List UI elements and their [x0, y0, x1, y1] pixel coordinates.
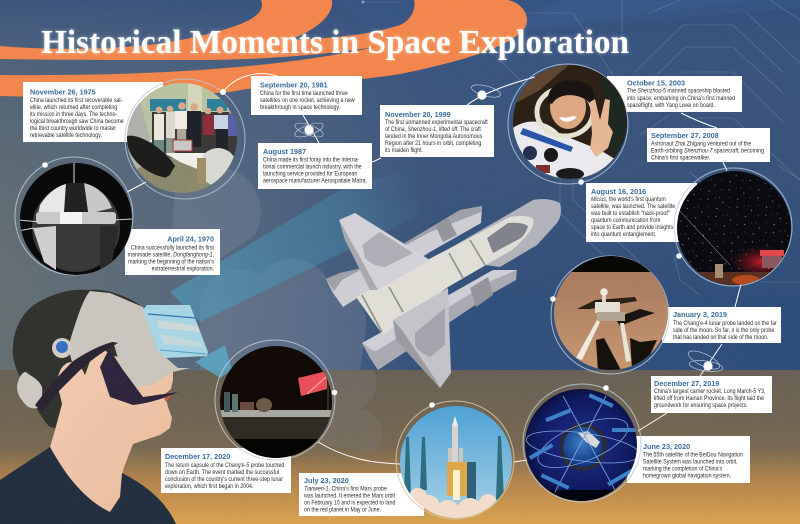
headset button [52, 338, 72, 358]
hair bun [17, 372, 42, 408]
upper booster [326, 206, 482, 307]
text: April 24, 1970: China successfully launched its first [131, 245, 214, 252]
photo: Long March rocket launch [396, 400, 516, 524]
text: January 3, 2019: January 3, 2019 [673, 310, 727, 319]
equipment [127, 102, 151, 169]
text: July 23, 2020: Tianwen-1, China's first Mars probe [304, 486, 387, 492]
text: July 23, 2020: was launched. It entered the Mars orbit [303, 493, 395, 499]
text: June 23, 2020: marking the completion of China's [643, 466, 722, 473]
fuselage stripes [362, 240, 485, 332]
atom icon: 1999 [470, 82, 502, 100]
text: January 3, 2019: The Chang'e-4 lunar probe landed on the far [673, 321, 777, 327]
text: June 23, 2020: homegrown global navigation system. [643, 473, 731, 480]
text: December 27, 2019: lifted off from Hainan Province. Its flight laid the [654, 396, 764, 402]
text box backgrounds [23, 76, 781, 516]
flag [298, 371, 327, 396]
photo: starry night sky [674, 168, 794, 288]
text: September 27, 2008 [651, 131, 764, 162]
exhaust clouds and light beams [170, 165, 420, 452]
atom icon: 1987 [293, 120, 325, 140]
eye mask shadow [100, 350, 178, 405]
text: April 24, 1970: marking the beginning of the nation's [128, 259, 214, 266]
photo: Chang'e-5 return capsule with flag [215, 340, 340, 465]
capsule and crew [256, 398, 272, 412]
text: December 17, 2020: conclusion of the country's current three-step lunar [165, 477, 283, 483]
title: Historical Moments in Space Exploration [41, 24, 629, 61]
text: October 15, 2003: spaceflight, with Yang Liwei on board. [627, 103, 715, 109]
text: January 3, 2019: that has landed on that side of the moon. [673, 335, 769, 341]
hair [13, 290, 143, 430]
text: October 15, 2003: October 15, 2003 [627, 78, 685, 88]
photo: 1975 recovery satellite team [125, 79, 245, 199]
orange swoosh [0, 0, 527, 97]
text: September 27, 2008: China's first spacewalker. [651, 155, 711, 162]
text: November 26, 1975 [30, 88, 124, 139]
text: August 16, 2016: into quantum entanglement. [591, 232, 657, 238]
text: July 23, 2020: July 23, 2020 [304, 476, 349, 485]
text: September 20, 1981: September 20, 1981 [260, 80, 328, 90]
headset shell [68, 291, 190, 388]
text: August 1987: China made its first foray into the interna- [263, 157, 359, 164]
nose cone [433, 199, 561, 267]
text: November 20, 1999: landed in the Inner Mongolia Autonomous [385, 134, 482, 140]
lower booster [362, 270, 517, 370]
photo: Chang'e-4 lunar rover [550, 255, 675, 374]
text: December 17, 2020 [165, 452, 284, 490]
text: December 27, 2019: groundwork for ensuring space projects. [654, 403, 748, 409]
text: April 24, 1970: April 24, 1970 [167, 235, 214, 244]
space shuttle [326, 199, 561, 388]
text: December 27, 2019 [654, 379, 766, 409]
text: July 23, 2020: on the red planet in May or June. [304, 507, 381, 513]
text: September 27, 2008: Earth-orbiting Shenzhou-7 spacecraft, becoming [651, 148, 764, 155]
text: December 17, 2020: December 17, 2020 [165, 452, 230, 461]
text: August 1987: aerospace manufacturer Aerospatiale Matra. [263, 178, 367, 185]
text: June 23, 2020: The 55th satellite of the BeiDou Navigation [643, 452, 743, 459]
shirt [0, 447, 176, 524]
lower wing [393, 288, 451, 388]
text: January 3, 2019: side of the moon. So far, it is the only probe [673, 328, 774, 334]
text: September 20, 1981: China for the first time launched three [260, 91, 348, 97]
text: September 20, 1981: satellites on one rocket, achieving a new [260, 98, 355, 104]
text: July 23, 2020 [303, 476, 395, 513]
text: August 1987: launching service provided for European [263, 171, 357, 178]
text: November 20, 1999: its maiden flight. [385, 148, 423, 154]
lips [164, 391, 172, 402]
text: August 16, 2016: Micius, the world's first quantum [591, 197, 666, 203]
cockpit window [487, 223, 528, 253]
neck and face [50, 342, 173, 512]
visor [143, 305, 208, 358]
text: December 17, 2020: down on Earth. The event marked the successful [165, 470, 279, 476]
person wearing VR headset [0, 290, 208, 524]
upper wing [339, 213, 430, 290]
atom icon: 2019 [686, 347, 724, 373]
text: November 20, 1999: Region after 21 hours in orbit, completing [385, 141, 481, 147]
text: August 1987: tional commercial launch industry, with the [263, 164, 362, 171]
text: August 1987: August 1987 [263, 147, 306, 156]
text: September 20, 1981: breakthrough in space technology. [260, 105, 340, 111]
text: November 20, 1999: November 20, 1999 [385, 110, 451, 119]
text: November 26, 1975: retrievable satellite technology. [30, 133, 102, 139]
text: April 24, 1970: extraterrestrial exploration. [152, 266, 214, 273]
text: April 24, 1970 [128, 235, 214, 273]
text: November 20, 1999 [385, 110, 488, 154]
circuit lines [361, 0, 800, 295]
photo: Dongfanghong-1 satellite [15, 157, 140, 280]
text: October 15, 2003: The Shenzhou-5 manned spaceship blasted [627, 88, 730, 95]
text: December 27, 2019: China's largest carrier rocket, Long March-5 Y3, [654, 389, 766, 395]
text: November 26, 1975: China launched its first recoverable sat- [30, 98, 123, 104]
text: September 27, 2008: September 27, 2008 [651, 131, 719, 140]
text: August 1987 [263, 147, 367, 185]
rover [595, 288, 625, 321]
fuselage [356, 216, 534, 335]
text: August 16, 2016: was built to establish "hack-proof" [590, 211, 670, 217]
text: October 15, 2003: into space, embarking on China's first manned [627, 96, 735, 102]
text: April 24, 1970: manmade satellite, Dongfanghong-1, [128, 252, 214, 259]
connector lines [127, 74, 741, 464]
photo: BeiDou satellites orbiting Earth [520, 384, 645, 505]
text: November 26, 1975: its mission in three days. The techno- [30, 112, 117, 118]
text: September 27, 2008: Astronaut Zhai Zhigang ventured out of the [651, 141, 751, 148]
text: June 23, 2020: June 23, 2020 [643, 442, 690, 451]
text: September 20, 1981 [260, 80, 355, 111]
crowd [152, 102, 242, 156]
text: November 20, 1999: of China, Shenzhou-1, lifted off. The craft [385, 127, 481, 133]
victory hand [590, 99, 613, 157]
text: January 3, 2019 [673, 310, 777, 341]
text: August 16, 2016: quantum communication from [591, 218, 661, 224]
text: June 23, 2020 [643, 442, 743, 480]
text: June 23, 2020: Satellite System was launched into orbit, [643, 459, 738, 466]
text: July 23, 2020: on February 10 and is expected to land [304, 500, 395, 506]
text: August 16, 2016 [590, 187, 675, 238]
text: August 16, 2016: space to Earth and provide insights [591, 225, 673, 231]
text: November 26, 1975: the third country worldwide to master [30, 126, 116, 132]
text: December 17, 2020: The return capsule of the Chang'e-5 probe touched [165, 463, 284, 469]
photo: astronaut Yang Liwei [508, 64, 630, 185]
text: November 26, 1975: logical breakthrough saw China become [30, 119, 124, 125]
text: November 20, 1999: The first unmanned experimental spacecraft [385, 120, 488, 126]
text: November 26, 1975: ellite, which returned after completing [30, 105, 117, 111]
headset strap [35, 342, 118, 412]
text: December 17, 2020: exploration, which first began in 2004. [165, 484, 254, 490]
text: December 27, 2019: December 27, 2019 [654, 379, 719, 388]
text: August 16, 2016: August 16, 2016 [591, 187, 646, 196]
text: August 16, 2016: satellite, was launched. The satellite [591, 204, 675, 210]
text: October 15, 2003 [627, 78, 735, 109]
text: November 26, 1975: November 26, 1975 [30, 88, 96, 96]
